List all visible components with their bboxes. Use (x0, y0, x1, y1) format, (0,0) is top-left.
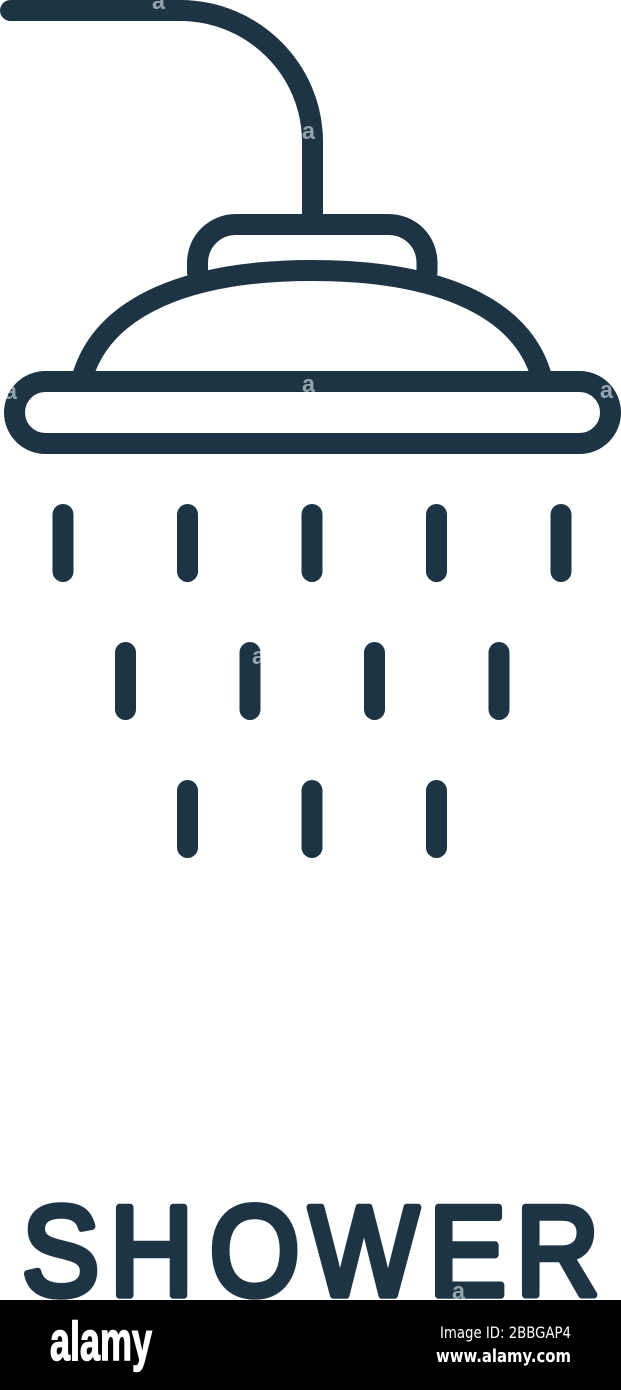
drops row 2 (115, 642, 510, 720)
icon: shower head cap (198, 224, 427, 272)
icon: shower head (10, 10, 610, 444)
title: SHOWER (22, 1180, 599, 1322)
image id: Image ID: 2BBGAP4 (440, 1323, 571, 1342)
watermark marks: a (452, 1278, 466, 1305)
icon: water drops (52, 504, 572, 858)
website: www.alamy.com (436, 1347, 571, 1367)
watermark marks: a (600, 377, 614, 404)
watermark marks: a (4, 378, 18, 405)
footer logo: alamy (50, 1310, 152, 1372)
drops row 1 (52, 504, 572, 582)
footer bar (0, 1300, 621, 1390)
watermark marks: a (302, 371, 316, 398)
icon: shower head plate (14, 382, 610, 444)
drops row 3 (177, 780, 447, 858)
watermark marks: a (252, 643, 266, 670)
watermark marks: a (302, 118, 316, 145)
icon: water pipe (10, 10, 312, 214)
icon: shower head dome (83, 270, 541, 375)
